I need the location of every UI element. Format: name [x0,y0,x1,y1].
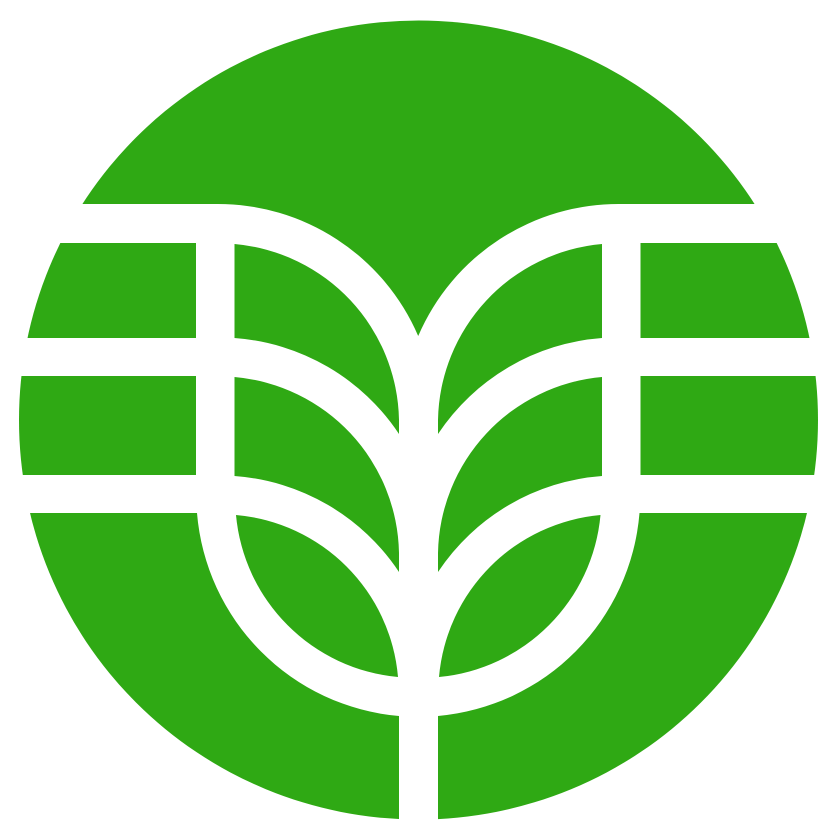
middle left bar [0,376,196,475]
lower left leaf [236,515,398,677]
canopy: top segment of the circle [82,20,754,336]
right side bars [640,243,818,475]
left leaves [234,244,399,677]
middle right bar [640,376,818,475]
bottom right segment [438,513,807,820]
bottom left segment [30,513,399,819]
upper right bar [640,243,810,338]
upper right leaf [438,244,602,434]
middle right leaf [438,377,602,572]
upper left bar [28,243,196,338]
upper left leaf [234,244,399,434]
right leaves [438,244,602,677]
lower right leaf [439,515,600,677]
middle left leaf [234,377,399,572]
left side bars [0,243,196,475]
